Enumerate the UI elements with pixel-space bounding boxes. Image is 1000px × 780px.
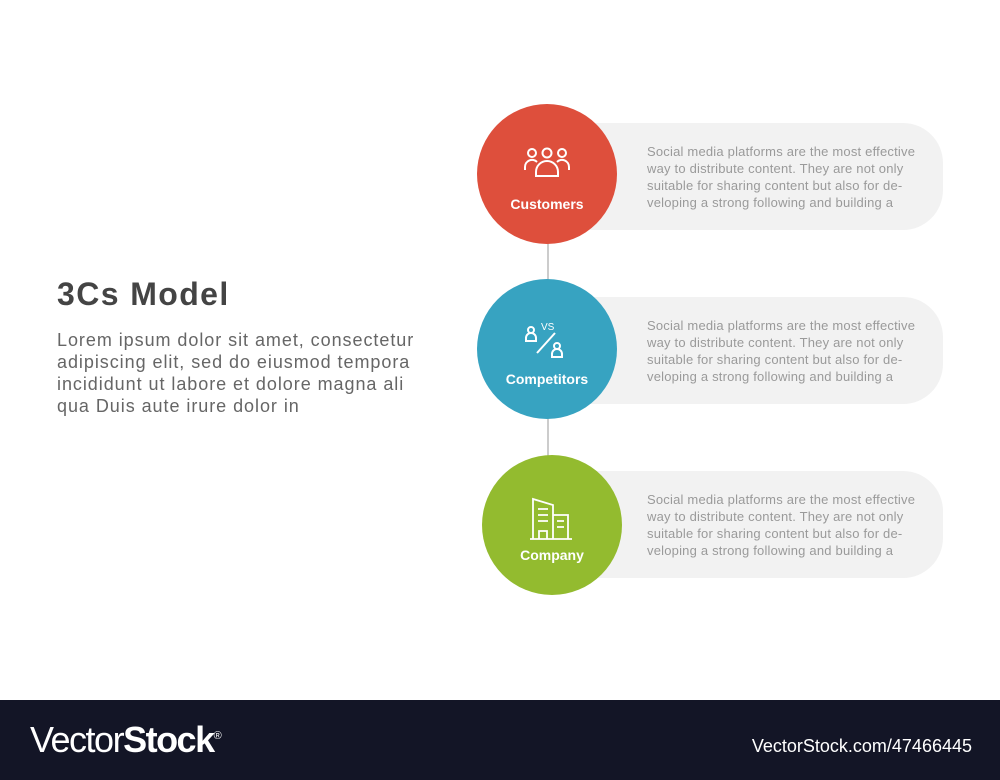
- panel: competitors text: way to distribute content. They are not only: [647, 335, 903, 350]
- panel: company text: veloping a strong following and building a: [647, 543, 893, 558]
- title: 3Cs Model: [57, 276, 230, 312]
- panel: customers text: way to distribute content. They are not only: [647, 161, 903, 176]
- panel: company text: suitable for sharing content but also for de-: [647, 526, 902, 541]
- description text: adipiscing elit, sed do eiusmod tempora: [57, 352, 410, 372]
- description text: incididunt ut labore et dolore magna ali: [57, 374, 404, 394]
- panel: competitors text: Social media platforms are the most effective: [647, 318, 915, 333]
- panel: competitors text: veloping a strong following and building a: [647, 369, 893, 384]
- circle: customers: [477, 104, 617, 244]
- circle: customers: Customers: [510, 196, 584, 212]
- icon: people: [524, 148, 570, 177]
- panel: customers text: suitable for sharing content but also for de-: [647, 178, 902, 193]
- panel: competitors text: [560, 297, 943, 404]
- icon: versus: VS: [541, 322, 555, 333]
- circle: company: [482, 455, 622, 595]
- panel: competitors text: suitable for sharing content but also for de-: [647, 352, 902, 367]
- circle: competitors: [477, 279, 617, 419]
- panel: customers text: veloping a strong following and building a: [647, 195, 893, 210]
- panel: customers text: Social media platforms are the most effective: [647, 144, 915, 159]
- panel: company text: Social media platforms are the most effective: [647, 492, 915, 507]
- circle: competitors: Competitors: [506, 371, 588, 387]
- description text: [57, 330, 414, 416]
- panel: company text: way to distribute content. They are not only: [647, 509, 903, 524]
- circle: company: Company: [520, 547, 584, 563]
- image id: VectorStock.com/47466445: [752, 736, 972, 756]
- footer: [0, 700, 1000, 780]
- description text: qua Duis aute irure dolor in: [57, 396, 300, 416]
- logo: VectorStock®: [30, 719, 220, 760]
- description text: Lorem ipsum dolor sit amet, consectetur: [57, 330, 414, 350]
- icon: versus: [525, 322, 563, 358]
- panel: customers text: [560, 123, 943, 230]
- icon: buildings: [530, 498, 572, 540]
- panel: company text: [560, 471, 943, 578]
